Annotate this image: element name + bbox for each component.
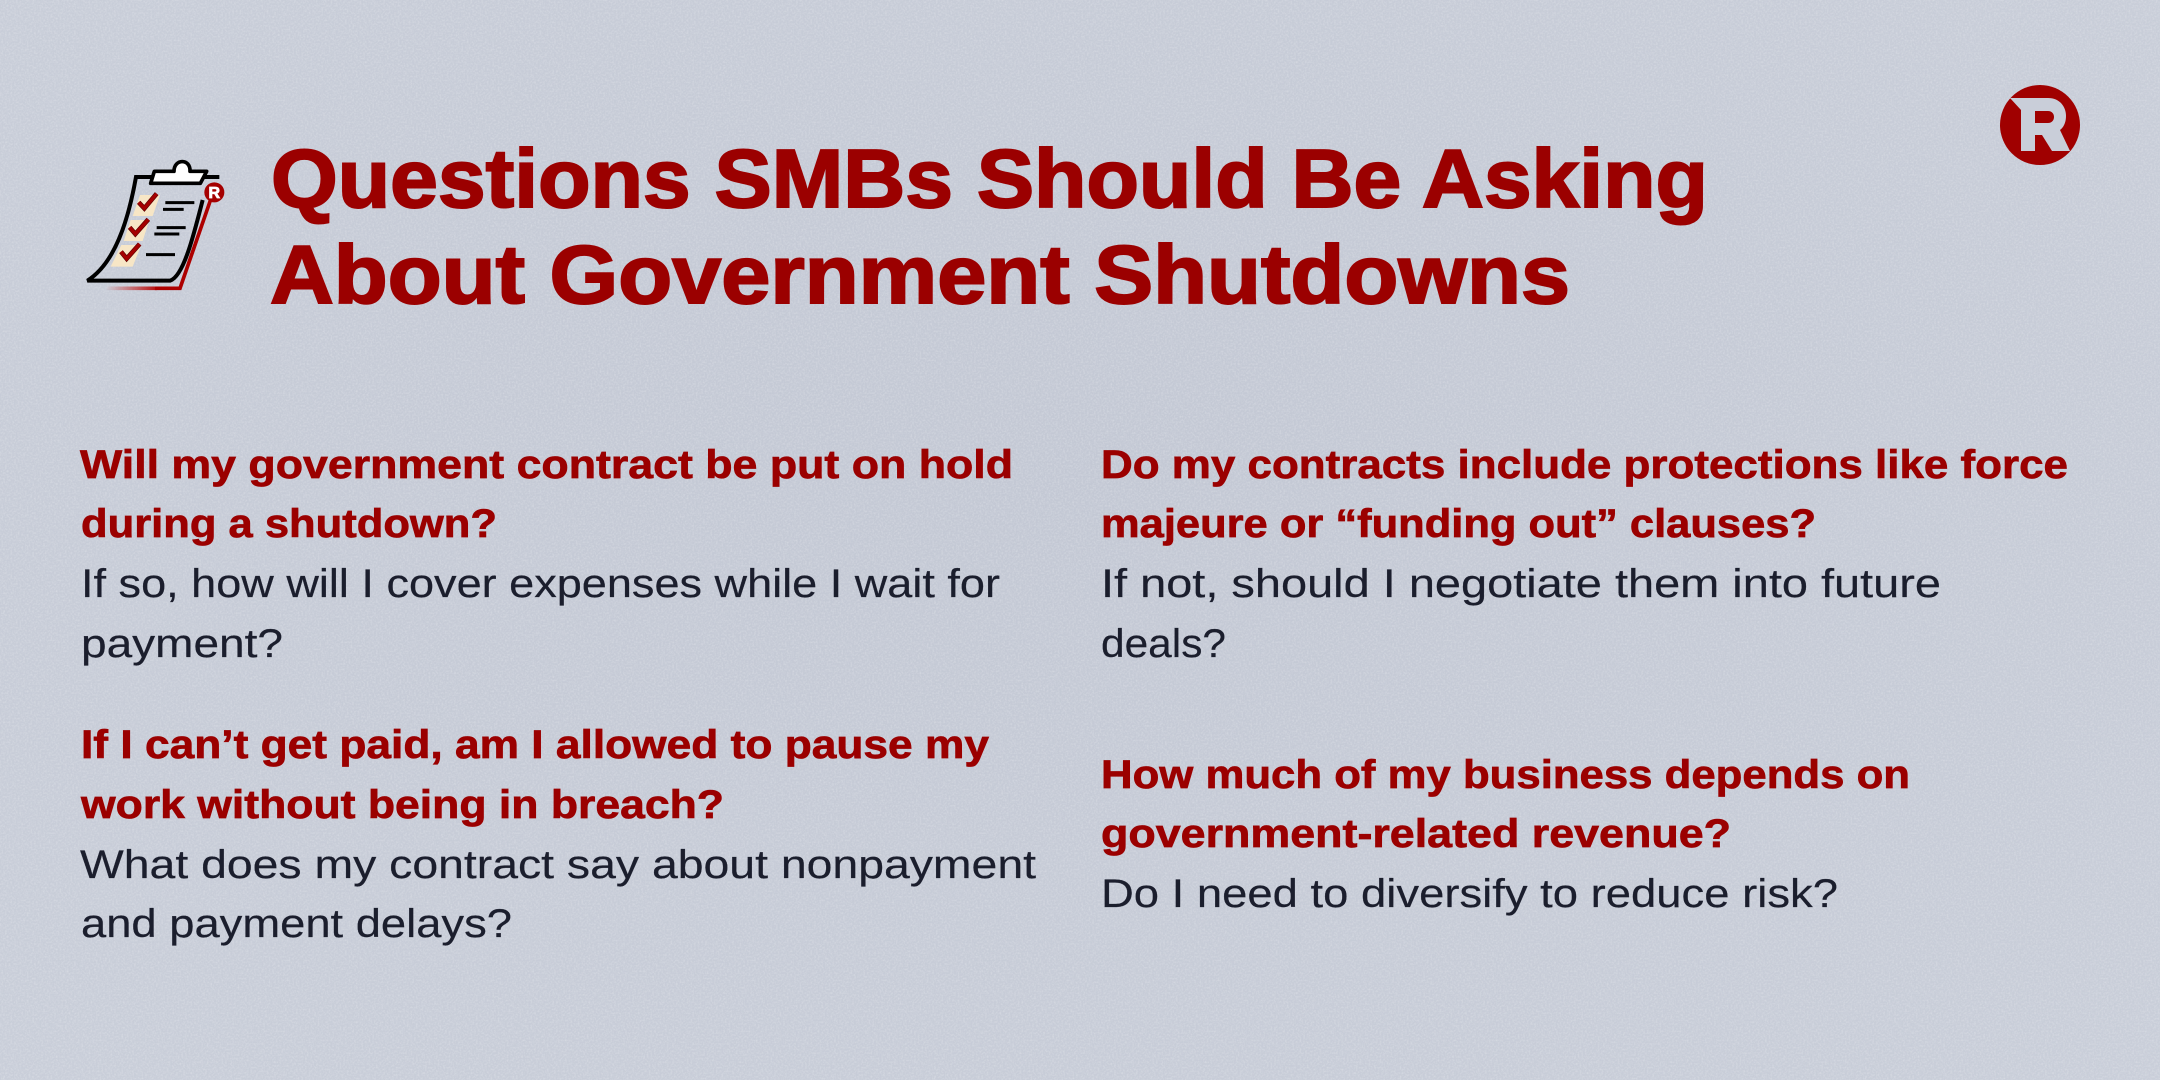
question block: revenue dependence: [1101, 753, 1910, 916]
title: About Government Shutdowns: [270, 228, 1570, 321]
question block: pause work: If I can’t get paid, am I allowed to pause my: [81, 723, 990, 767]
clip: [151, 162, 207, 183]
red shadow line: [107, 283, 157, 294]
question block: contract on hold: If so, how will I cover expenses while I wait for: [81, 562, 1000, 606]
question block: contract on hold: during a shutdown?: [81, 502, 497, 546]
R badge: [204, 182, 224, 202]
question block: pause work: [80, 723, 1036, 946]
checkmarks: [139, 194, 157, 208]
question block: contract protections: Do my contracts include protections like force: [1101, 443, 2068, 487]
question block: contract protections: deals?: [1101, 622, 1226, 666]
question block: pause work: work without being in breach?: [80, 783, 724, 827]
question block: contract on hold: payment?: [81, 622, 283, 666]
question block: contract on hold: [80, 443, 1013, 666]
question block: revenue dependence: Do I need to diversify to reduce risk?: [1101, 872, 1838, 916]
question block: contract protections: If not, should I negotiate them into future: [1101, 562, 1941, 606]
question block: contract protections: [1101, 443, 2068, 666]
checkboxes: [133, 195, 160, 216]
question block: pause work: What does my contract say about nonpayment: [80, 843, 1036, 887]
question block: contract protections: majeure or “funding out” clauses?: [1101, 502, 1816, 546]
icon: clipboard checklist: R: [209, 185, 221, 202]
title: [270, 132, 1708, 321]
question block: pause work: and payment delays?: [81, 902, 512, 946]
question block: revenue dependence: government-related revenue?: [1101, 812, 1731, 856]
paper outline: [87, 177, 219, 281]
question block: revenue dependence: How much of my business depends on: [1101, 753, 1910, 797]
logo: R mark: [2000, 85, 2080, 165]
question block: contract on hold: Will my government contract be put on hold: [80, 443, 1013, 487]
title: Questions SMBs Should Be Asking: [271, 132, 1708, 225]
icon: clipboard checklist: [87, 162, 224, 288]
list lines: [146, 203, 194, 255]
